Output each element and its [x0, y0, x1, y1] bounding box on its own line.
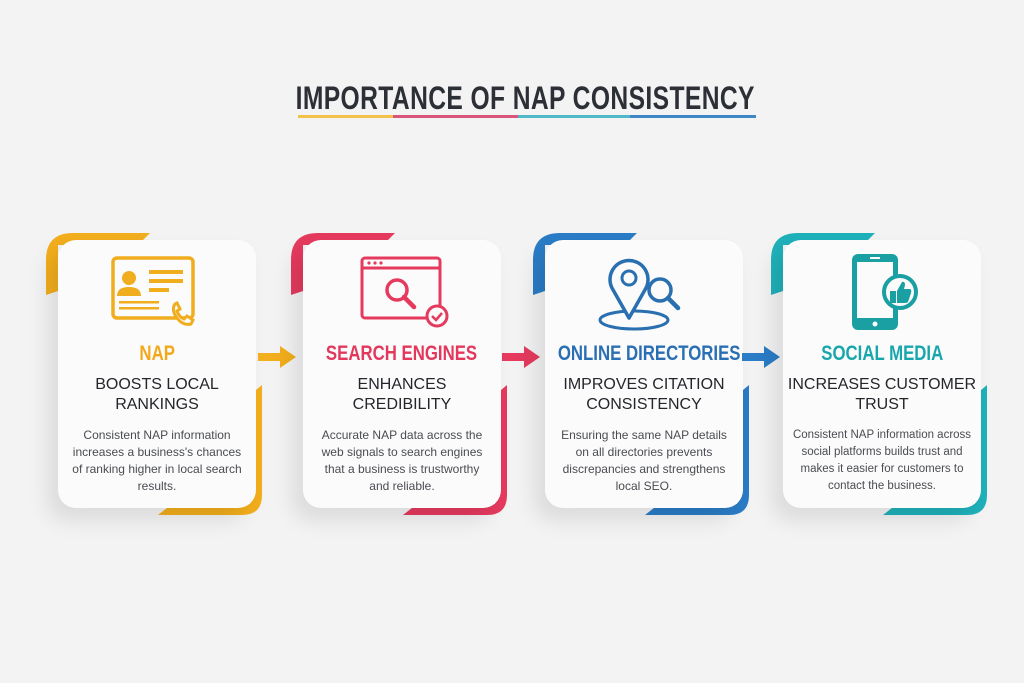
heading: NAP [139, 342, 175, 365]
accent bracket pink [291, 233, 507, 515]
heading: ONLINE DIRECTORIES [558, 342, 740, 365]
card: Social Media [768, 233, 987, 524]
body text: Consistent NAP information across social platforms builds trust and makes it easier for customers to contact the business. [793, 429, 971, 492]
subheading: CREDIBILITY [353, 396, 451, 413]
heading: SOCIAL MEDIA [821, 342, 943, 365]
subheading: INCREASES CUSTOMER [788, 376, 976, 393]
body text: Consistent NAP information increases a business's chances of ranking higher in local search results. [72, 428, 242, 493]
card: Online Directories [530, 233, 749, 524]
card: NAP [44, 233, 262, 524]
arrow 2 [502, 346, 540, 368]
subheading: BOOSTS LOCAL [95, 376, 219, 393]
heading: SEARCH ENGINES [326, 342, 478, 365]
arrow 3 [742, 346, 780, 368]
subheading [353, 376, 451, 413]
icon: contact card with phone [111, 256, 195, 326]
icon: map pin with magnifier [598, 258, 680, 330]
body text: Ensuring the same NAP details on all directories prevents discrepancies and strengthens local SEO. [561, 428, 727, 493]
accent bracket teal [771, 233, 987, 515]
accent bracket yellow [46, 233, 262, 515]
subheading: RANKINGS [115, 396, 199, 413]
arrow 1 [258, 346, 296, 368]
accent bracket blue [533, 233, 749, 515]
subheading: ENHANCES [358, 376, 446, 393]
subheading [788, 376, 976, 413]
title: IMPORTANCE OF NAP CONSISTENCY [296, 80, 755, 116]
subheading: IMPROVES CITATION [563, 376, 725, 393]
icon: phone with thumbs up [852, 254, 918, 330]
body text: Accurate NAP data across the web signals to search engines that a business is trustworthy and reliable. [322, 428, 482, 493]
subheading: TRUST [855, 396, 909, 413]
subheading: CONSISTENCY [586, 396, 702, 413]
icon: browser with magnifier and check [360, 256, 448, 328]
title underline [298, 115, 756, 118]
subheading [563, 376, 725, 413]
subheading [95, 376, 219, 413]
card: Search Engines [288, 233, 507, 524]
